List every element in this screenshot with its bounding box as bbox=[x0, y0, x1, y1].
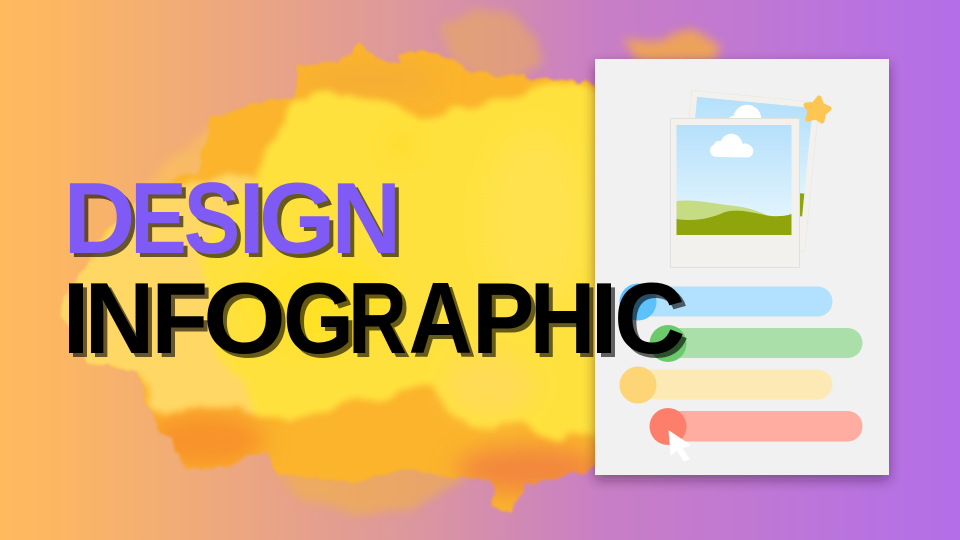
title: INFOGRAPHIC: H bbox=[530, 263, 596, 375]
title: DESIGN: S bbox=[184, 163, 240, 275]
title: DESIGN shadow: G bbox=[263, 167, 340, 279]
back polaroid photo bbox=[677, 90, 819, 252]
title: INFOGRAPHIC shadow: P bbox=[476, 267, 538, 379]
front polaroid photo bbox=[670, 118, 800, 268]
title: INFOGRAPHIC: O bbox=[203, 263, 286, 375]
title: INFOGRAPHIC shadow: C bbox=[618, 267, 690, 379]
dark green hill bbox=[676, 211, 792, 235]
list bar: blue bbox=[620, 284, 832, 320]
title: DESIGN shadow bbox=[67, 167, 405, 279]
title: INFOGRAPHIC shadow: R bbox=[352, 267, 411, 379]
title: DESIGN shadow: D bbox=[67, 167, 139, 279]
title: DESIGN shadow: E bbox=[134, 167, 191, 279]
title: INFOGRAPHIC: P bbox=[472, 263, 534, 375]
title: INFOGRAPHIC: G bbox=[283, 263, 354, 375]
title: DESIGN: D bbox=[63, 163, 135, 275]
title: INFOGRAPHIC shadow bbox=[66, 267, 690, 379]
title: DESIGN shadow: S bbox=[188, 167, 244, 279]
title: INFOGRAPHIC shadow: I bbox=[594, 267, 622, 379]
title: INFOGRAPHIC: I bbox=[590, 263, 618, 375]
title: INFOGRAPHIC shadow: A bbox=[412, 267, 476, 379]
icon: star bbox=[806, 98, 829, 121]
title: INFOGRAPHIC shadow: F bbox=[156, 267, 212, 379]
title: INFOGRAPHIC: N bbox=[84, 263, 154, 375]
title: INFOGRAPHIC: A bbox=[408, 263, 472, 375]
title: DESIGN: N bbox=[331, 163, 401, 275]
title: INFOGRAPHIC shadow: G bbox=[287, 267, 358, 379]
title: INFOGRAPHIC: R bbox=[348, 263, 407, 375]
title: DESIGN: E bbox=[130, 163, 187, 275]
title: INFOGRAPHIC shadow: H bbox=[534, 267, 600, 379]
title: DESIGN: G bbox=[259, 163, 336, 275]
icon: mouse cursor bbox=[669, 431, 690, 461]
title: INFOGRAPHIC bbox=[62, 263, 686, 375]
title: INFOGRAPHIC shadow: O bbox=[207, 267, 290, 379]
list bar: red bbox=[650, 408, 862, 445]
title: DESIGN: I bbox=[239, 163, 265, 275]
title: INFOGRAPHIC: I bbox=[62, 263, 90, 375]
watercolor splash bbox=[40, 10, 722, 530]
title: DESIGN bbox=[63, 163, 401, 275]
title: INFOGRAPHIC: C bbox=[614, 263, 686, 375]
list bar: yellow bbox=[620, 366, 832, 404]
light green hill bbox=[676, 201, 772, 235]
title: INFOGRAPHIC shadow: N bbox=[88, 267, 158, 379]
title: DESIGN shadow: N bbox=[335, 167, 405, 279]
list bar: green bbox=[650, 325, 862, 362]
title: DESIGN shadow: I bbox=[243, 167, 269, 279]
panel: white card bbox=[595, 59, 889, 475]
title: INFOGRAPHIC shadow: I bbox=[66, 267, 94, 379]
title: INFOGRAPHIC: F bbox=[152, 263, 208, 375]
cloud bbox=[710, 134, 753, 158]
